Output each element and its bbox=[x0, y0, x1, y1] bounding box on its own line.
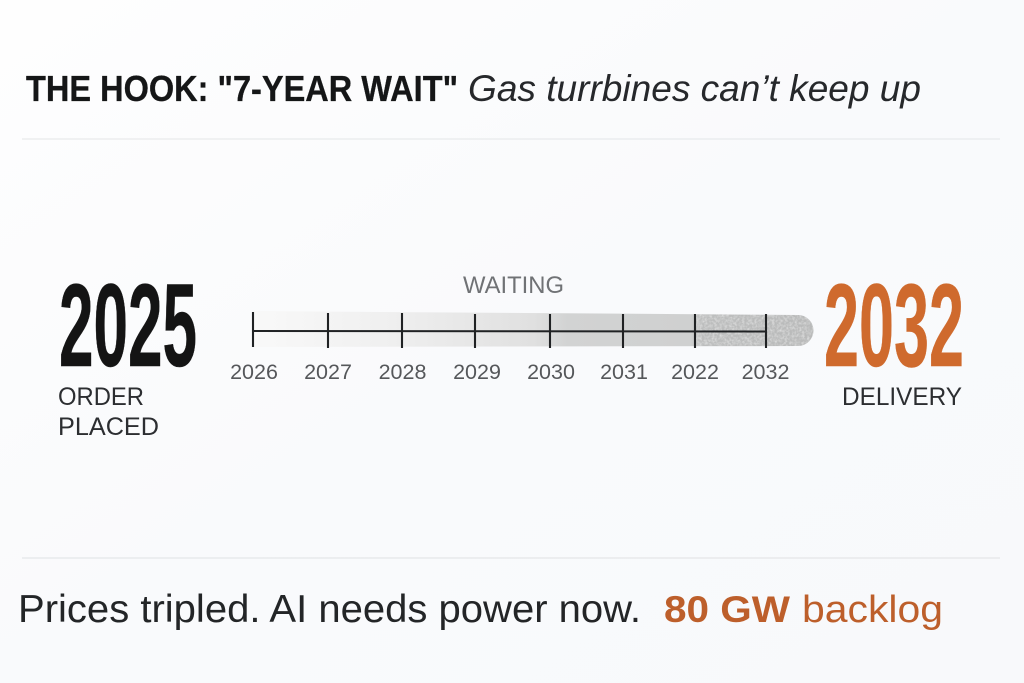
year labels: 2028 bbox=[379, 360, 426, 384]
year labels: 2031 bbox=[600, 360, 648, 384]
start year: 2025 order placed: ORDER bbox=[58, 383, 144, 411]
year labels: 2029 bbox=[453, 360, 501, 384]
timeline bbox=[230, 272, 813, 384]
bottom takeaway: 80 GW bbox=[664, 589, 790, 630]
title: Gas turrbines can’t keep up bbox=[468, 68, 921, 109]
end year: 2032 delivery: DELIVERY bbox=[842, 383, 962, 411]
waiting progress bar bbox=[253, 311, 813, 347]
start year: 2025 order placed: PLACED bbox=[58, 413, 159, 441]
end year: 2032 delivery bbox=[824, 260, 964, 411]
year labels: 2026 bbox=[230, 360, 278, 384]
year labels: 2032 bbox=[742, 360, 789, 384]
waiting label: WAITING bbox=[463, 272, 564, 299]
year labels: 2030 bbox=[527, 360, 575, 384]
timeline axis with ticks bbox=[253, 312, 766, 348]
start year: 2025 order placed: 2025 bbox=[59, 260, 197, 392]
bar grain texture bbox=[695, 314, 813, 346]
start year: 2025 order placed bbox=[58, 260, 197, 441]
title bbox=[26, 68, 921, 109]
year labels: 2022 bbox=[671, 360, 719, 384]
bottom takeaway: backlog bbox=[802, 589, 943, 631]
bottom takeaway bbox=[18, 588, 943, 631]
year labels bbox=[230, 360, 789, 384]
year labels: 2027 bbox=[304, 360, 352, 384]
title: THE HOOK: "7-YEAR WAIT" bbox=[26, 68, 458, 109]
bottom takeaway: Prices tripled. AI needs power now. bbox=[18, 588, 641, 631]
